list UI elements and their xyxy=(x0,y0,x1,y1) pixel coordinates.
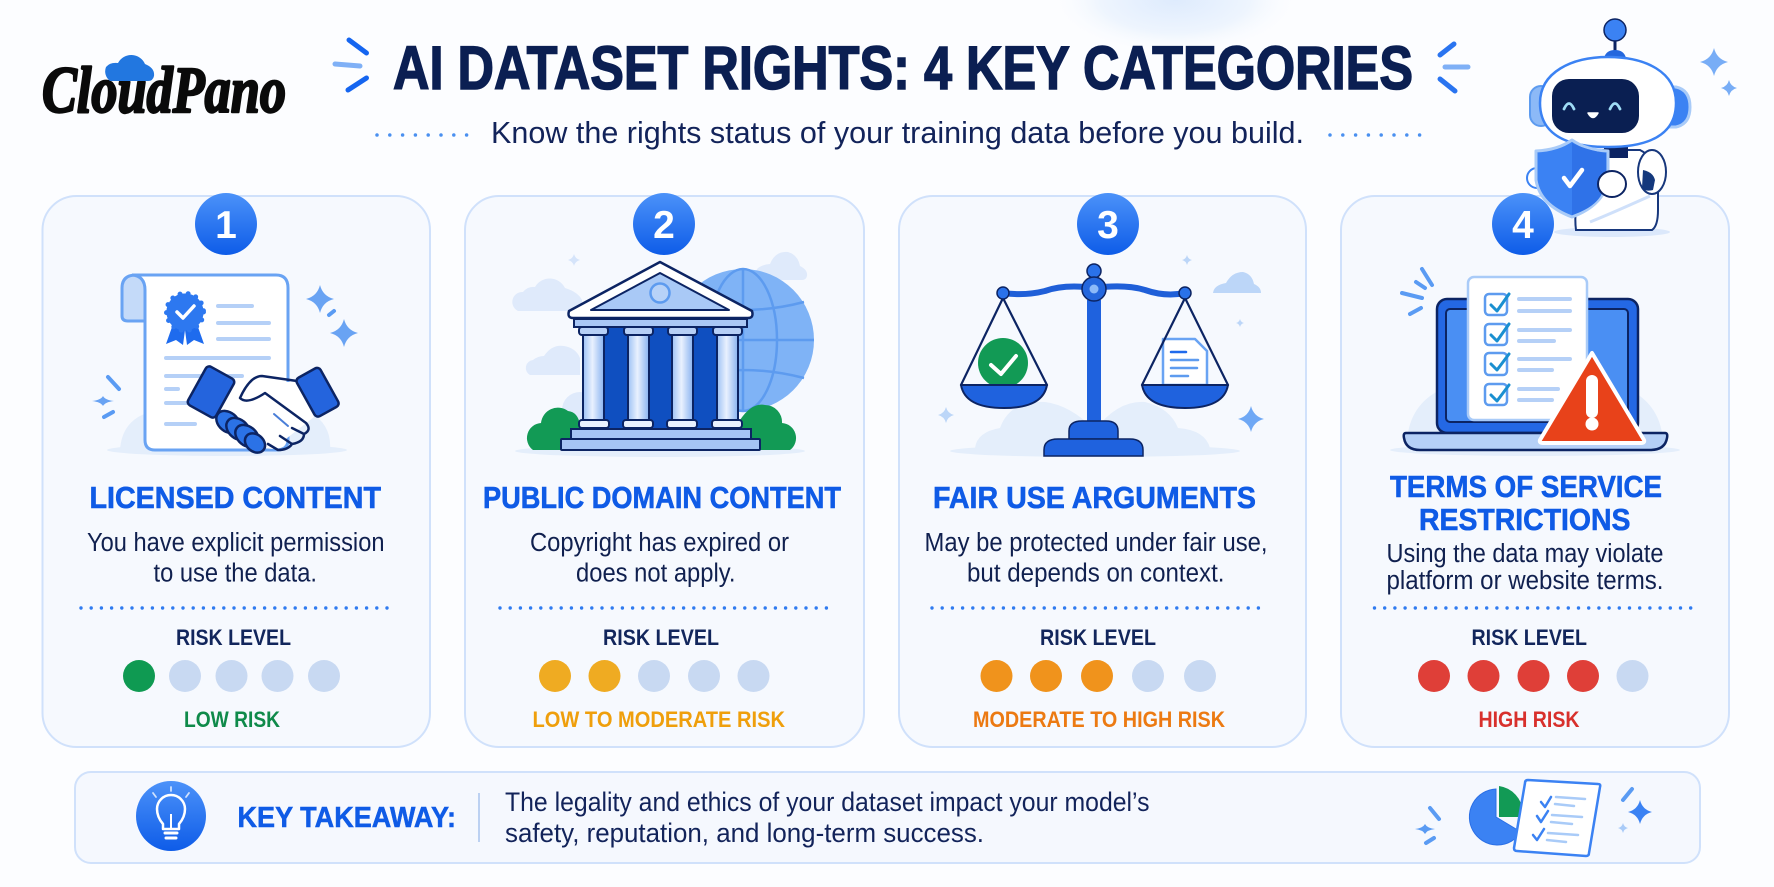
icon: courthouse with globe xyxy=(512,252,814,457)
icon: balance scale xyxy=(938,255,1264,457)
description: platform or website terms. xyxy=(1386,567,1664,595)
description: Using the data may violate xyxy=(1386,540,1664,568)
icon: title burst right xyxy=(1440,44,1468,91)
subtitle: Know the rights status of your training data before you build. xyxy=(491,115,1304,150)
number badge 2 xyxy=(633,193,695,255)
risk level label: RISK LEVEL xyxy=(176,625,291,650)
icon: logo cloud xyxy=(105,55,154,81)
number badge 1: 1 xyxy=(215,204,237,247)
description: to use the data. xyxy=(154,560,317,588)
icon: license scroll and handshake xyxy=(92,275,358,457)
icon: pie chart and checklist xyxy=(1415,780,1652,856)
description xyxy=(1386,540,1664,595)
description xyxy=(530,529,789,588)
title: AI DATASET RIGHTS: 4 KEY CATEGORIES xyxy=(393,34,1413,102)
panel: terms of service restrictions xyxy=(1341,193,1729,747)
description xyxy=(87,529,384,588)
key takeaway label: KEY TAKEAWAY: xyxy=(238,802,456,834)
panel: key takeaway xyxy=(75,772,1700,863)
description: Copyright has expired or xyxy=(530,529,789,557)
heading: TERMS OF SERVICE xyxy=(1390,469,1662,504)
logo: CloudPano xyxy=(42,54,286,127)
risk dots: 4 of 5 xyxy=(1418,660,1648,692)
description: May be protected under fair use, xyxy=(924,529,1268,557)
number badge 4 xyxy=(1492,193,1554,255)
risk dots: 2 of 5 xyxy=(539,660,770,692)
number badge 3: 3 xyxy=(1097,204,1119,247)
risk status: MODERATE TO HIGH RISK xyxy=(973,707,1225,732)
risk dots: 3 of 5 xyxy=(980,660,1216,692)
risk level label: RISK LEVEL xyxy=(1040,625,1156,650)
heading xyxy=(1390,469,1662,537)
icon: robot mascot with shield xyxy=(1527,19,1737,237)
panel: public domain content xyxy=(465,193,864,747)
risk level label: RISK LEVEL xyxy=(1472,625,1587,650)
risk dots: 1 of 5 xyxy=(123,660,340,692)
panel: licensed content xyxy=(42,193,430,747)
icon: light bulb xyxy=(136,781,206,851)
description: You have explicit permission xyxy=(87,529,384,557)
heading: FAIR USE ARGUMENTS xyxy=(933,480,1256,515)
icon: title burst left xyxy=(335,40,366,90)
risk level label: RISK LEVEL xyxy=(603,625,719,650)
heading: LICENSED CONTENT xyxy=(90,480,381,515)
risk status: LOW RISK xyxy=(184,707,280,732)
description xyxy=(924,529,1268,588)
description: but depends on context. xyxy=(967,560,1224,588)
risk status: HIGH RISK xyxy=(1478,707,1580,732)
takeaway text: The legality and ethics of your dataset impact your model’s xyxy=(505,787,1150,817)
number badge 1 xyxy=(195,193,257,255)
number badge 3 xyxy=(1077,193,1139,255)
takeaway text xyxy=(505,787,1150,848)
number badge 4: 4 xyxy=(1512,204,1534,247)
logo wordmark: CloudPano xyxy=(42,54,286,127)
icon: laptop with checklist and warning xyxy=(1390,269,1680,456)
heading: PUBLIC DOMAIN CONTENT xyxy=(483,480,841,515)
description: does not apply. xyxy=(576,560,736,588)
risk status: LOW TO MODERATE RISK xyxy=(532,707,785,732)
heading: RESTRICTIONS xyxy=(1419,502,1630,537)
number badge 2: 2 xyxy=(653,204,675,247)
panel: fair use arguments xyxy=(899,193,1306,747)
takeaway text: safety, reputation, and long-term success. xyxy=(505,818,984,848)
